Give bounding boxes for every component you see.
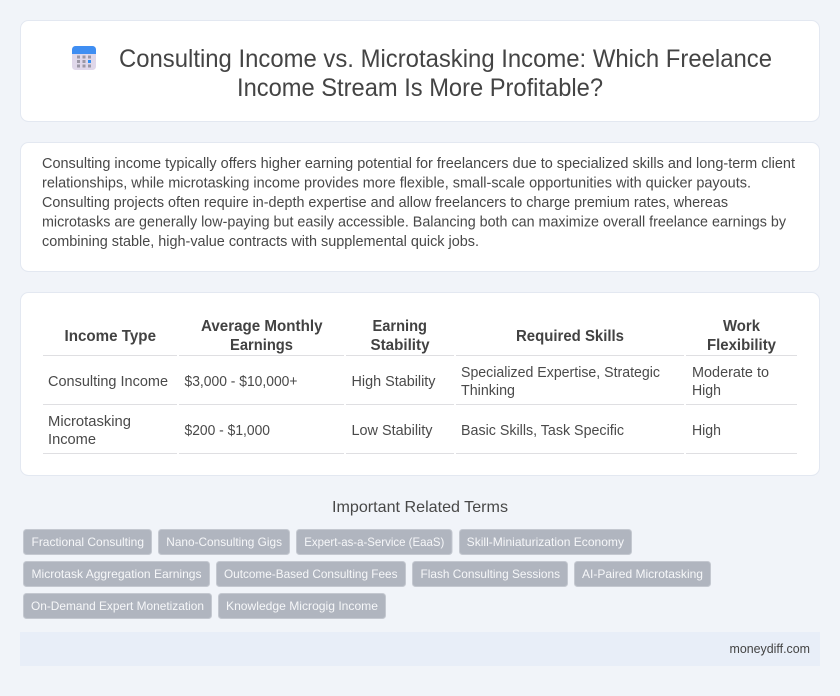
- table row: consulting income: Specialized Expertise, Strategic: [461, 365, 660, 381]
- table header row: Work: [723, 318, 760, 335]
- panel: summary paragraph: [20, 142, 820, 272]
- table row: microtasking income: Low Stability: [352, 423, 433, 439]
- table header row: Earnings: [230, 337, 293, 354]
- text block: summary: Consulting projects often require in-depth expertise and allow freelancers to charge premium rates, whereas: [42, 195, 728, 211]
- tag: Fractional Consulting: [24, 530, 152, 554]
- icon: calendar: [72, 46, 96, 70]
- text block: summary: combining stable, high-value contracts with supplemental quick jobs.: [42, 234, 479, 250]
- tag: Expert-as-a-Service (EaaS): [296, 530, 452, 554]
- footer bar: [20, 632, 820, 666]
- tag: Nano-Consulting Gigs: Nano-Consulting Gigs: [166, 535, 282, 549]
- table header row: Average Monthly: [201, 318, 323, 335]
- tag: Microtask Aggregation Earnings: [24, 562, 210, 586]
- table row: consulting income: [48, 365, 769, 399]
- table row: microtasking income: High: [692, 423, 721, 439]
- text block: summary: microtasks are generally low-paying but easily accessible. Balancing both can maximize overall freelance earnings by: [42, 214, 787, 230]
- panel: related term tags: [24, 530, 710, 618]
- heading: important related terms: Important Related Terms: [332, 499, 508, 516]
- tag: Nano-Consulting Gigs: [158, 530, 290, 554]
- table header row: Required Skills: [516, 328, 624, 345]
- tag: Flash Consulting Sessions: Flash Consulting Sessions: [420, 567, 560, 581]
- table row: microtasking income: Basic Skills, Task Specific: [461, 423, 624, 439]
- table header row: Stability: [370, 337, 430, 354]
- tag: On-Demand Expert Monetization: On-Demand Expert Monetization: [31, 599, 204, 613]
- table row: microtasking income: [48, 414, 721, 448]
- text block: summary: [42, 156, 795, 250]
- panel: comparison table: [20, 292, 820, 476]
- tag: Outcome-Based Consulting Fees: [216, 562, 406, 586]
- table row: consulting income: Moderate to: [692, 365, 769, 381]
- title: Consulting Income vs. Microtasking Income: Which Freelance: [119, 45, 772, 73]
- tag: Flash Consulting Sessions: [412, 562, 568, 586]
- tag: Microtask Aggregation Earnings: Microtask Aggregation Earnings: [32, 567, 202, 581]
- text block: summary: Consulting income typically offers higher earning potential for freelancers due to specialized skills and long-term client: [42, 156, 795, 172]
- tag: Knowledge Microgig Income: Knowledge Microgig Income: [226, 599, 378, 613]
- table row: microtasking income: Income: [48, 432, 96, 448]
- table row: consulting income: Consulting Income: [48, 374, 168, 390]
- tag: AI-Paired Microtasking: [574, 562, 710, 586]
- table row: consulting income: $3,000 - $10,000+: [184, 374, 298, 390]
- text block: summary: relationships, while microtasking income provides more flexible, small-scale opportunities with quicker payouts.: [42, 176, 751, 192]
- table header row: [64, 318, 776, 354]
- table row: consulting income: High: [692, 383, 721, 399]
- table row: microtasking income: Microtasking: [48, 414, 131, 430]
- tag: Skill-Miniaturization Economy: [460, 530, 632, 554]
- tag: Skill-Miniaturization Economy: Skill-Miniaturization Economy: [467, 535, 624, 549]
- tag: Outcome-Based Consulting Fees: Outcome-Based Consulting Fees: [224, 567, 398, 581]
- footer bar: moneydiff.com: [730, 642, 810, 656]
- table header row: Income Type: [64, 328, 156, 345]
- tag: On-Demand Expert Monetization: [24, 594, 212, 618]
- table header row: Flexibility: [707, 337, 776, 354]
- table row: consulting income: Thinking: [461, 383, 515, 399]
- table row: consulting income: High Stability: [352, 374, 436, 390]
- table header row: Earning: [372, 318, 427, 335]
- title: [119, 45, 772, 102]
- tag: AI-Paired Microtasking: AI-Paired Microtasking: [582, 567, 703, 581]
- panel: title header: [20, 20, 820, 122]
- table row: microtasking income: $200 - $1,000: [184, 423, 270, 439]
- title: Income Stream Is More Profitable?: [237, 74, 603, 102]
- tag: Expert-as-a-Service (EaaS): Expert-as-a-Service (EaaS): [304, 535, 444, 549]
- tag: Fractional Consulting: Fractional Consulting: [32, 535, 144, 549]
- tag: Knowledge Microgig Income: [218, 594, 386, 618]
